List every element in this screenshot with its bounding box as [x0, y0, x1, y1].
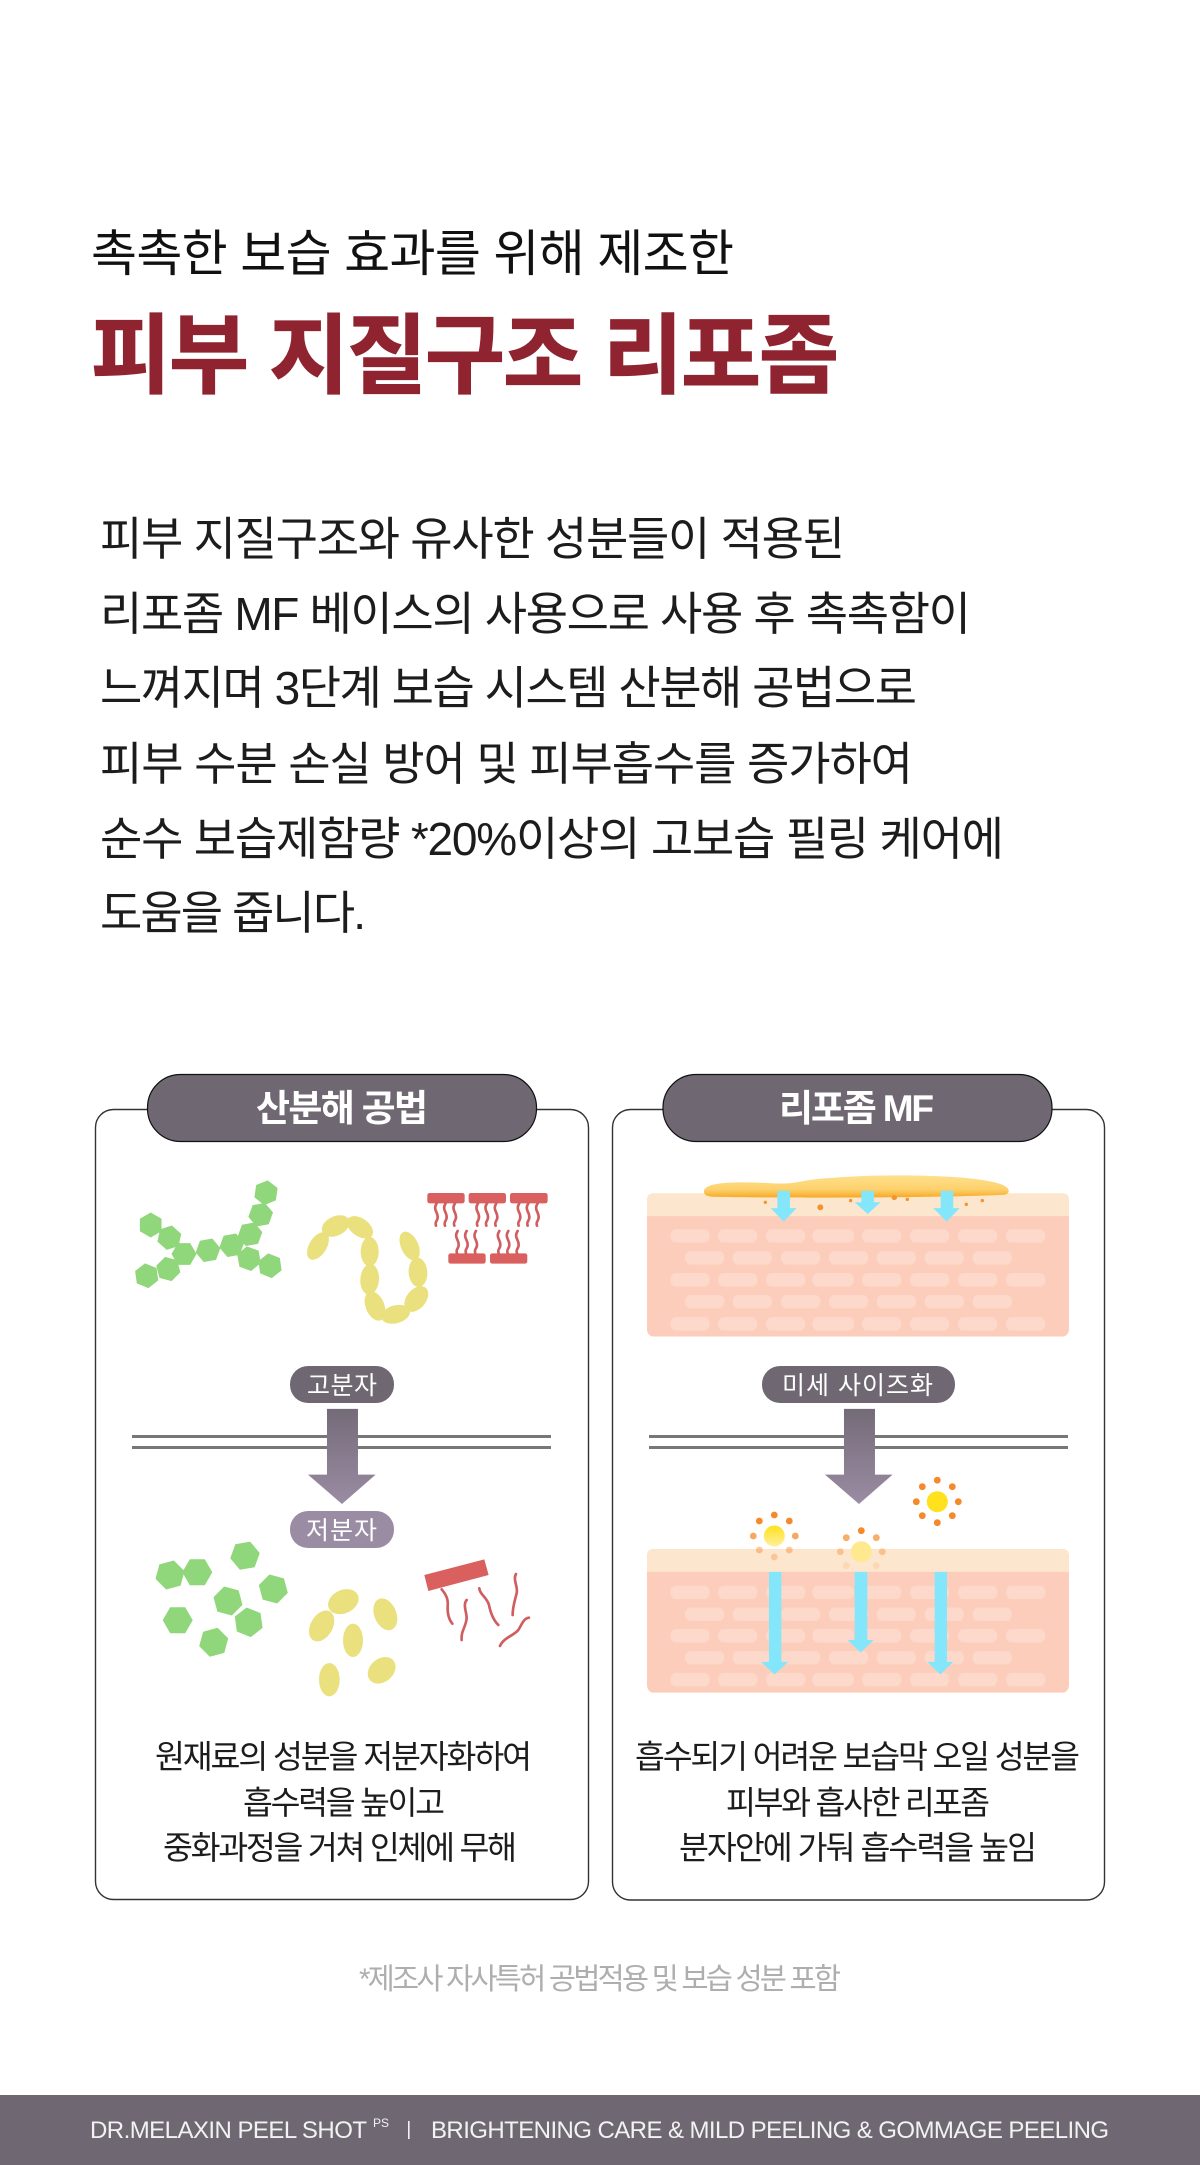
icon: moisture particle [913, 1477, 962, 1526]
body text block: 리포좀 MF 베이스의 사용으로 사용 후 촉촉함이 [100, 588, 971, 640]
caption: liposome: 흡수되기 어려운 보습막 오일 성분을 [635, 1739, 1080, 1775]
caption: hydrolysis: 중화과정을 거쳐 인체에 무해 [163, 1830, 517, 1866]
pill: micro sizing: 미세 사이즈화 [782, 1372, 933, 1400]
illustration: large molecule yellow chain [303, 1211, 433, 1327]
pill: micro sizing [762, 1366, 955, 1403]
panel: liposome MF [612, 1074, 1104, 1900]
body text block: 순수 보습제함량 *20%이상의 고보습 필링 케어에 [100, 813, 1004, 865]
pill: low molecular [290, 1511, 394, 1548]
caption: liposome: 피부와 흡사한 리포좀 [726, 1785, 990, 1821]
arrow: down [308, 1409, 376, 1504]
caption: hydrolysis: 원재료의 성분을 저분자화하여 [155, 1739, 532, 1775]
icon: moisture particle on skin surface [750, 1512, 799, 1560]
caption: liposome [635, 1739, 1080, 1866]
panel: hydrolysis method [96, 1074, 588, 1900]
panel heading pill: hydrolysis [148, 1074, 536, 1142]
pill: high molecular: 고분자 [307, 1372, 377, 1400]
footnote: *제조사 자사특허 공법적용 및 보습 성분 포함 [359, 1963, 841, 1996]
pill: high molecular [290, 1366, 394, 1403]
illustration: low molecule red pieces [424, 1559, 529, 1646]
panel heading pill: liposome: 리포좀 MF [779, 1088, 934, 1129]
caption: liposome: 분자안에 가둬 흡수력을 높임 [679, 1830, 1037, 1866]
illustration: large molecule red lipid layer [427, 1193, 548, 1264]
body text block: 피부 지질구조와 유사한 성분들이 적용된 [100, 513, 845, 565]
divider lines [649, 1435, 1068, 1449]
body text block: 느껴지며 3단계 보습 시스템 산분해 공법으로 [100, 662, 917, 714]
arrow: down [825, 1409, 893, 1504]
illustration: low molecule hexagons [154, 1537, 290, 1660]
footer bar: DR.MELAXIN PEEL SHOT [90, 2117, 367, 2144]
body text block [100, 513, 1004, 939]
panel heading pill: liposome [663, 1074, 1052, 1142]
caption: hydrolysis [155, 1739, 532, 1866]
illustration: skin with oil film [647, 1175, 1069, 1337]
heading: title: 피부 지질구조 리포좀 [91, 308, 839, 405]
panel heading pill: hydrolysis: 산분해 공법 [256, 1088, 428, 1129]
heading: subtitle: 촉촉한 보습 효과를 위해 제조한 [91, 226, 734, 282]
footer bar [0, 2095, 1200, 2165]
illustration: low molecule yellow pieces [304, 1584, 402, 1696]
divider lines [132, 1435, 551, 1449]
caption: hydrolysis: 흡수력을 높이고 [243, 1785, 445, 1821]
pill: low molecular: 저분자 [306, 1517, 377, 1545]
illustration: skin with absorption [647, 1549, 1069, 1693]
footer bar: PS [373, 2116, 389, 2130]
body text block: 피부 수분 손실 방어 및 피부흡수를 증가하여 [100, 738, 913, 790]
icon: moisture particle absorbing [837, 1527, 886, 1569]
footer bar: BRIGHTENING CARE & MILD PEELING & GOMMAGE PEELING [431, 2117, 1109, 2144]
body text block: 도움을 줍니다. [100, 887, 366, 939]
illustration: large molecule hexagons [134, 1179, 282, 1290]
